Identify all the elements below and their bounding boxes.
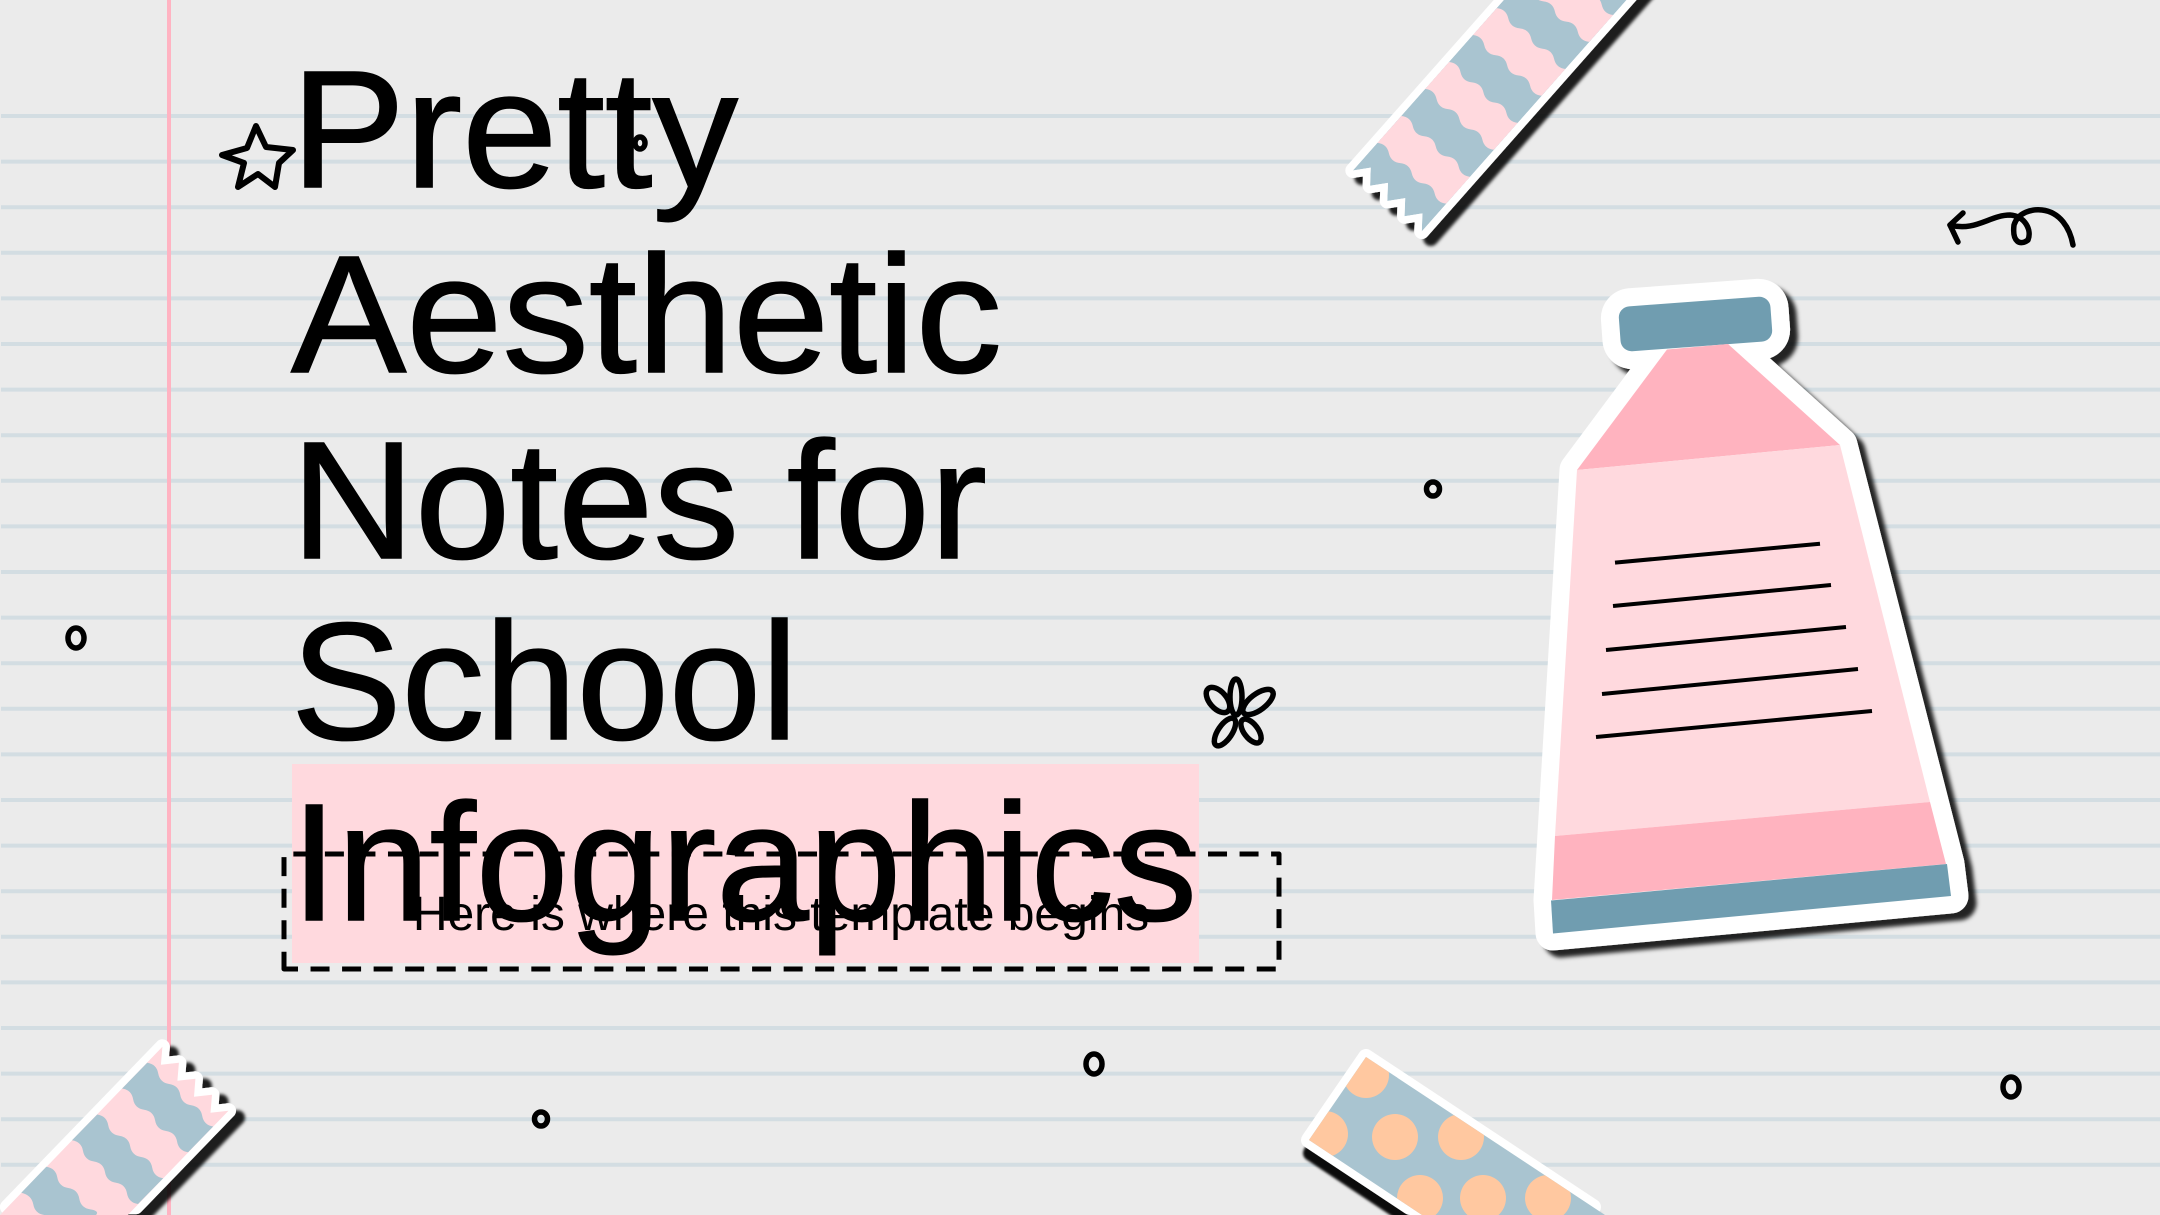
title — [291, 37, 1197, 956]
title: School — [291, 589, 798, 775]
washi tape: bottom, polka dots — [1302, 1052, 1605, 1215]
doodle: flower — [1202, 679, 1277, 749]
washi tape: bottom left, blue and pink waves — [0, 1047, 228, 1215]
title: Infographics — [291, 770, 1197, 956]
subtitle text: Here is where this template begins — [413, 888, 1149, 941]
title highlight — [292, 764, 1199, 963]
doodle: curly arrow — [1950, 210, 2073, 245]
tube lower band — [1552, 802, 1946, 900]
tube label — [1555, 445, 1930, 836]
red margin line — [167, 0, 171, 1215]
tube shoulder — [1577, 344, 1840, 470]
subtitle dashed frame — [284, 854, 1279, 969]
washi tape: top, blue and pink waves — [1353, 0, 1642, 231]
doodle: star — [222, 126, 293, 187]
title: Pretty — [291, 37, 738, 223]
tube white outline — [1551, 277, 1951, 933]
paint tube sticker — [1551, 277, 1951, 934]
tube label lines — [1596, 544, 1872, 737]
tube crimp — [1551, 864, 1951, 934]
title: Notes for — [291, 408, 987, 594]
tube cap — [1618, 296, 1773, 352]
doodle: small circles — [68, 137, 2019, 1126]
title: Aesthetic — [291, 222, 1002, 408]
